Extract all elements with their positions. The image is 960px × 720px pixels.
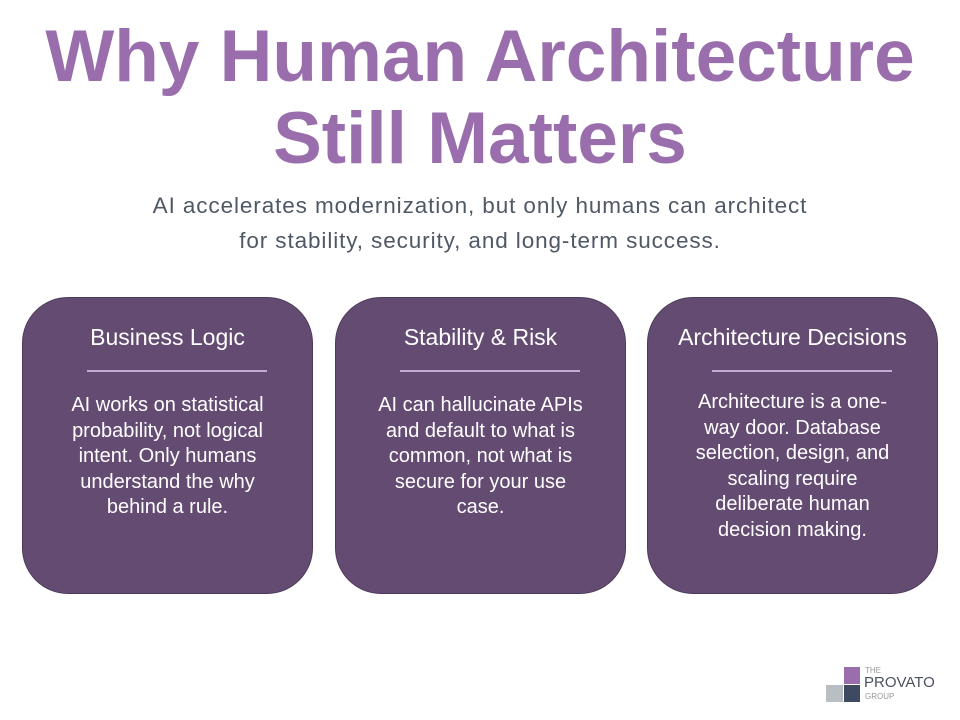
logo (826, 666, 935, 702)
heading: stability & risk: Stability & Risk (404, 324, 557, 350)
subtitle: for stability, security, and long-term success. (239, 228, 721, 253)
title: Why Human Architecture (45, 16, 915, 97)
logo: PROVATO (864, 674, 935, 691)
heading: business logic: Business Logic (90, 324, 245, 350)
title: Still Matters (273, 98, 687, 179)
panel: stability & risk (335, 297, 626, 594)
title (45, 16, 915, 179)
logo: GROUP (865, 692, 894, 701)
panel: business logic (22, 297, 313, 594)
text: stability & risk: AI can hallucinate APIs and default to what is common, not what is secure for your use case. (378, 394, 583, 518)
logo: THE (865, 666, 881, 675)
text: business logic: AI works on statistical probability, not logical intent. Only humans understand the why behind a rule. (71, 394, 264, 518)
panel: architecture decisions (647, 297, 938, 594)
heading: architecture decisions: Architecture Decisions (678, 324, 907, 350)
subtitle: AI accelerates modernization, but only humans can architect (153, 193, 807, 218)
subtitle (152, 193, 807, 253)
text: architecture decisions: Architecture is a one-way door. Database selection, design, and scaling require deliberate human decision making. (696, 391, 889, 540)
